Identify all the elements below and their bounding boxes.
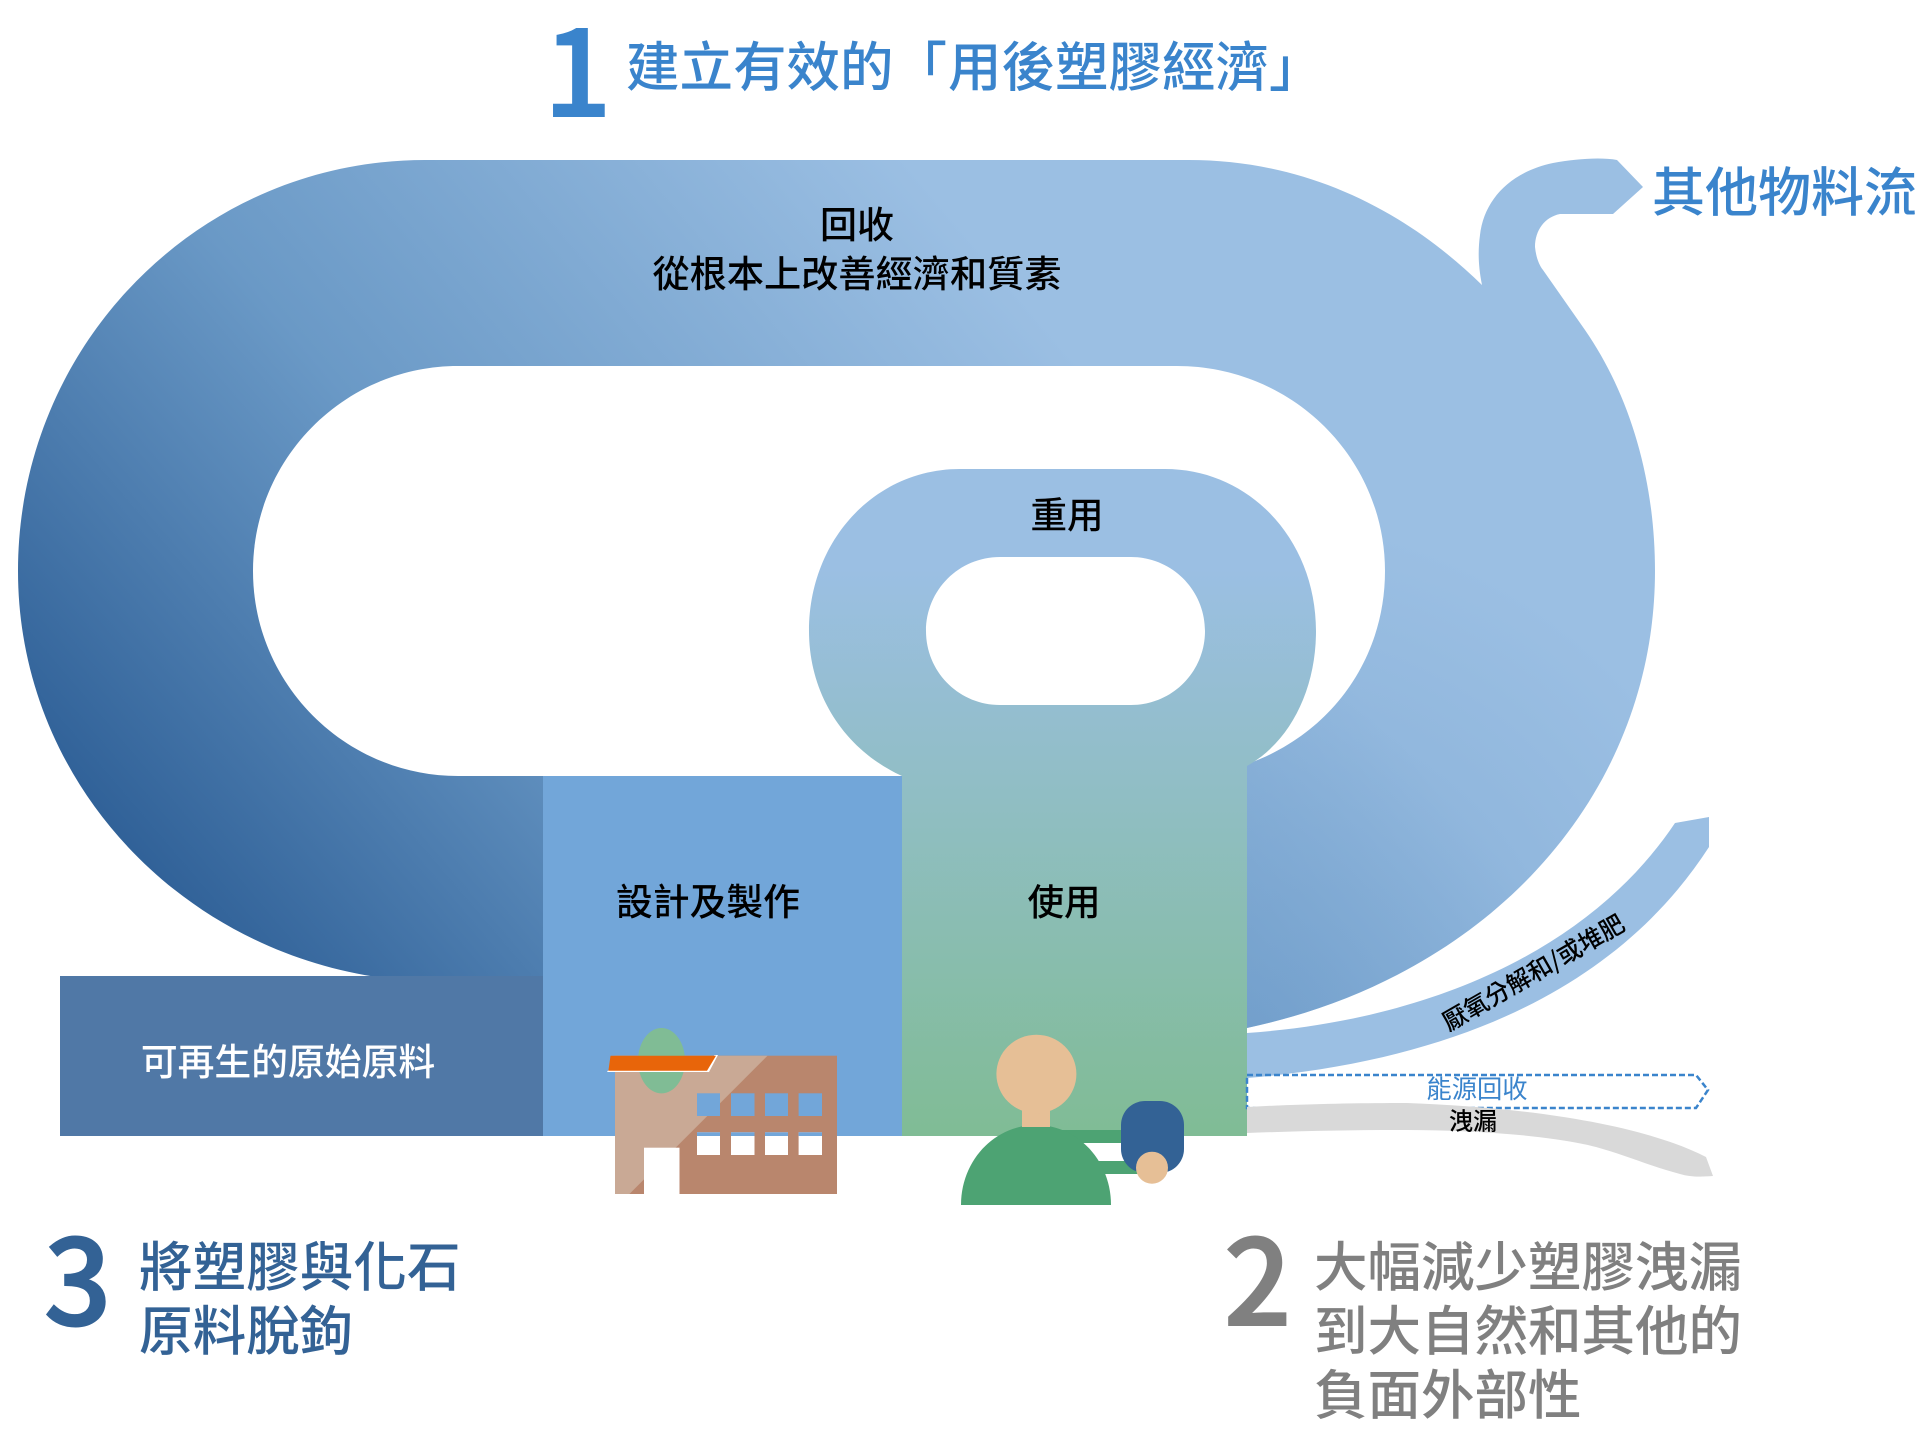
heading 2: drastically reduce plastic leakage: 2 — [1224, 1188, 1291, 1359]
title: effective after-use plastics economy: 建立有效的「 — [626, 25, 947, 102]
label: recycling — [652, 195, 1062, 298]
label: recycling: 從根本上改善經濟和質素 — [652, 244, 1062, 298]
panel: renewable virgin feedstock — [60, 976, 543, 1136]
panel: design and manufacture block — [543, 776, 902, 1136]
title: effective after-use plastics economy: 用後塑膠經濟」 — [948, 25, 1322, 102]
heading 2: drastically reduce plastic leakage — [1224, 1188, 1742, 1430]
label: use: 使用 — [1028, 873, 1100, 926]
heading 2: drastically reduce plastic leakage: 負面外部性 — [1314, 1353, 1582, 1430]
heading 3: decouple plastics from fossil feedstocks — [44, 1188, 461, 1366]
flow: leakage: 洩漏 — [1449, 1102, 1497, 1136]
heading 2: drastically reduce plastic leakage: 大幅減少塑膠洩漏 — [1314, 1225, 1742, 1302]
panel: renewable virgin feedstock: 可再生的原始原料 — [141, 1032, 435, 1086]
heading 3: decouple plastics from fossil feedstocks: 3 — [44, 1188, 111, 1359]
heading 2: drastically reduce plastic leakage: 到大自然和其他的 — [1314, 1289, 1742, 1366]
heading 3: decouple plastics from fossil feedstocks: 原料脫鉤 — [139, 1289, 353, 1366]
title: effective after-use plastics economy — [544, 0, 1322, 150]
flow: anaerobic digestion or composting: 厭氧分解和/或堆肥 — [1435, 905, 1631, 1039]
label: other material streams: 其他物料流 — [1652, 151, 1917, 227]
flow: energy recovery dashed arrow: 能源回收 — [1426, 1070, 1528, 1106]
label: recycling: 回收 — [820, 195, 894, 249]
flow: anaerobic digestion or composting — [1247, 817, 1709, 1078]
label: reuse: 重用 — [1030, 486, 1104, 539]
icon: factory building — [607, 1028, 837, 1194]
flow: energy recovery dashed arrow — [1247, 1070, 1708, 1108]
icon: person with phone — [961, 1035, 1184, 1205]
flow: leakage — [1247, 1102, 1713, 1177]
label: design and manufacture: 設計及製作 — [616, 872, 800, 926]
flow: other material streams arrow and recycling loop — [18, 159, 1655, 1028]
heading 3: decouple plastics from fossil feedstocks: 將塑膠與化石 — [139, 1225, 461, 1302]
flow: reuse loop and use column — [809, 469, 1316, 1136]
